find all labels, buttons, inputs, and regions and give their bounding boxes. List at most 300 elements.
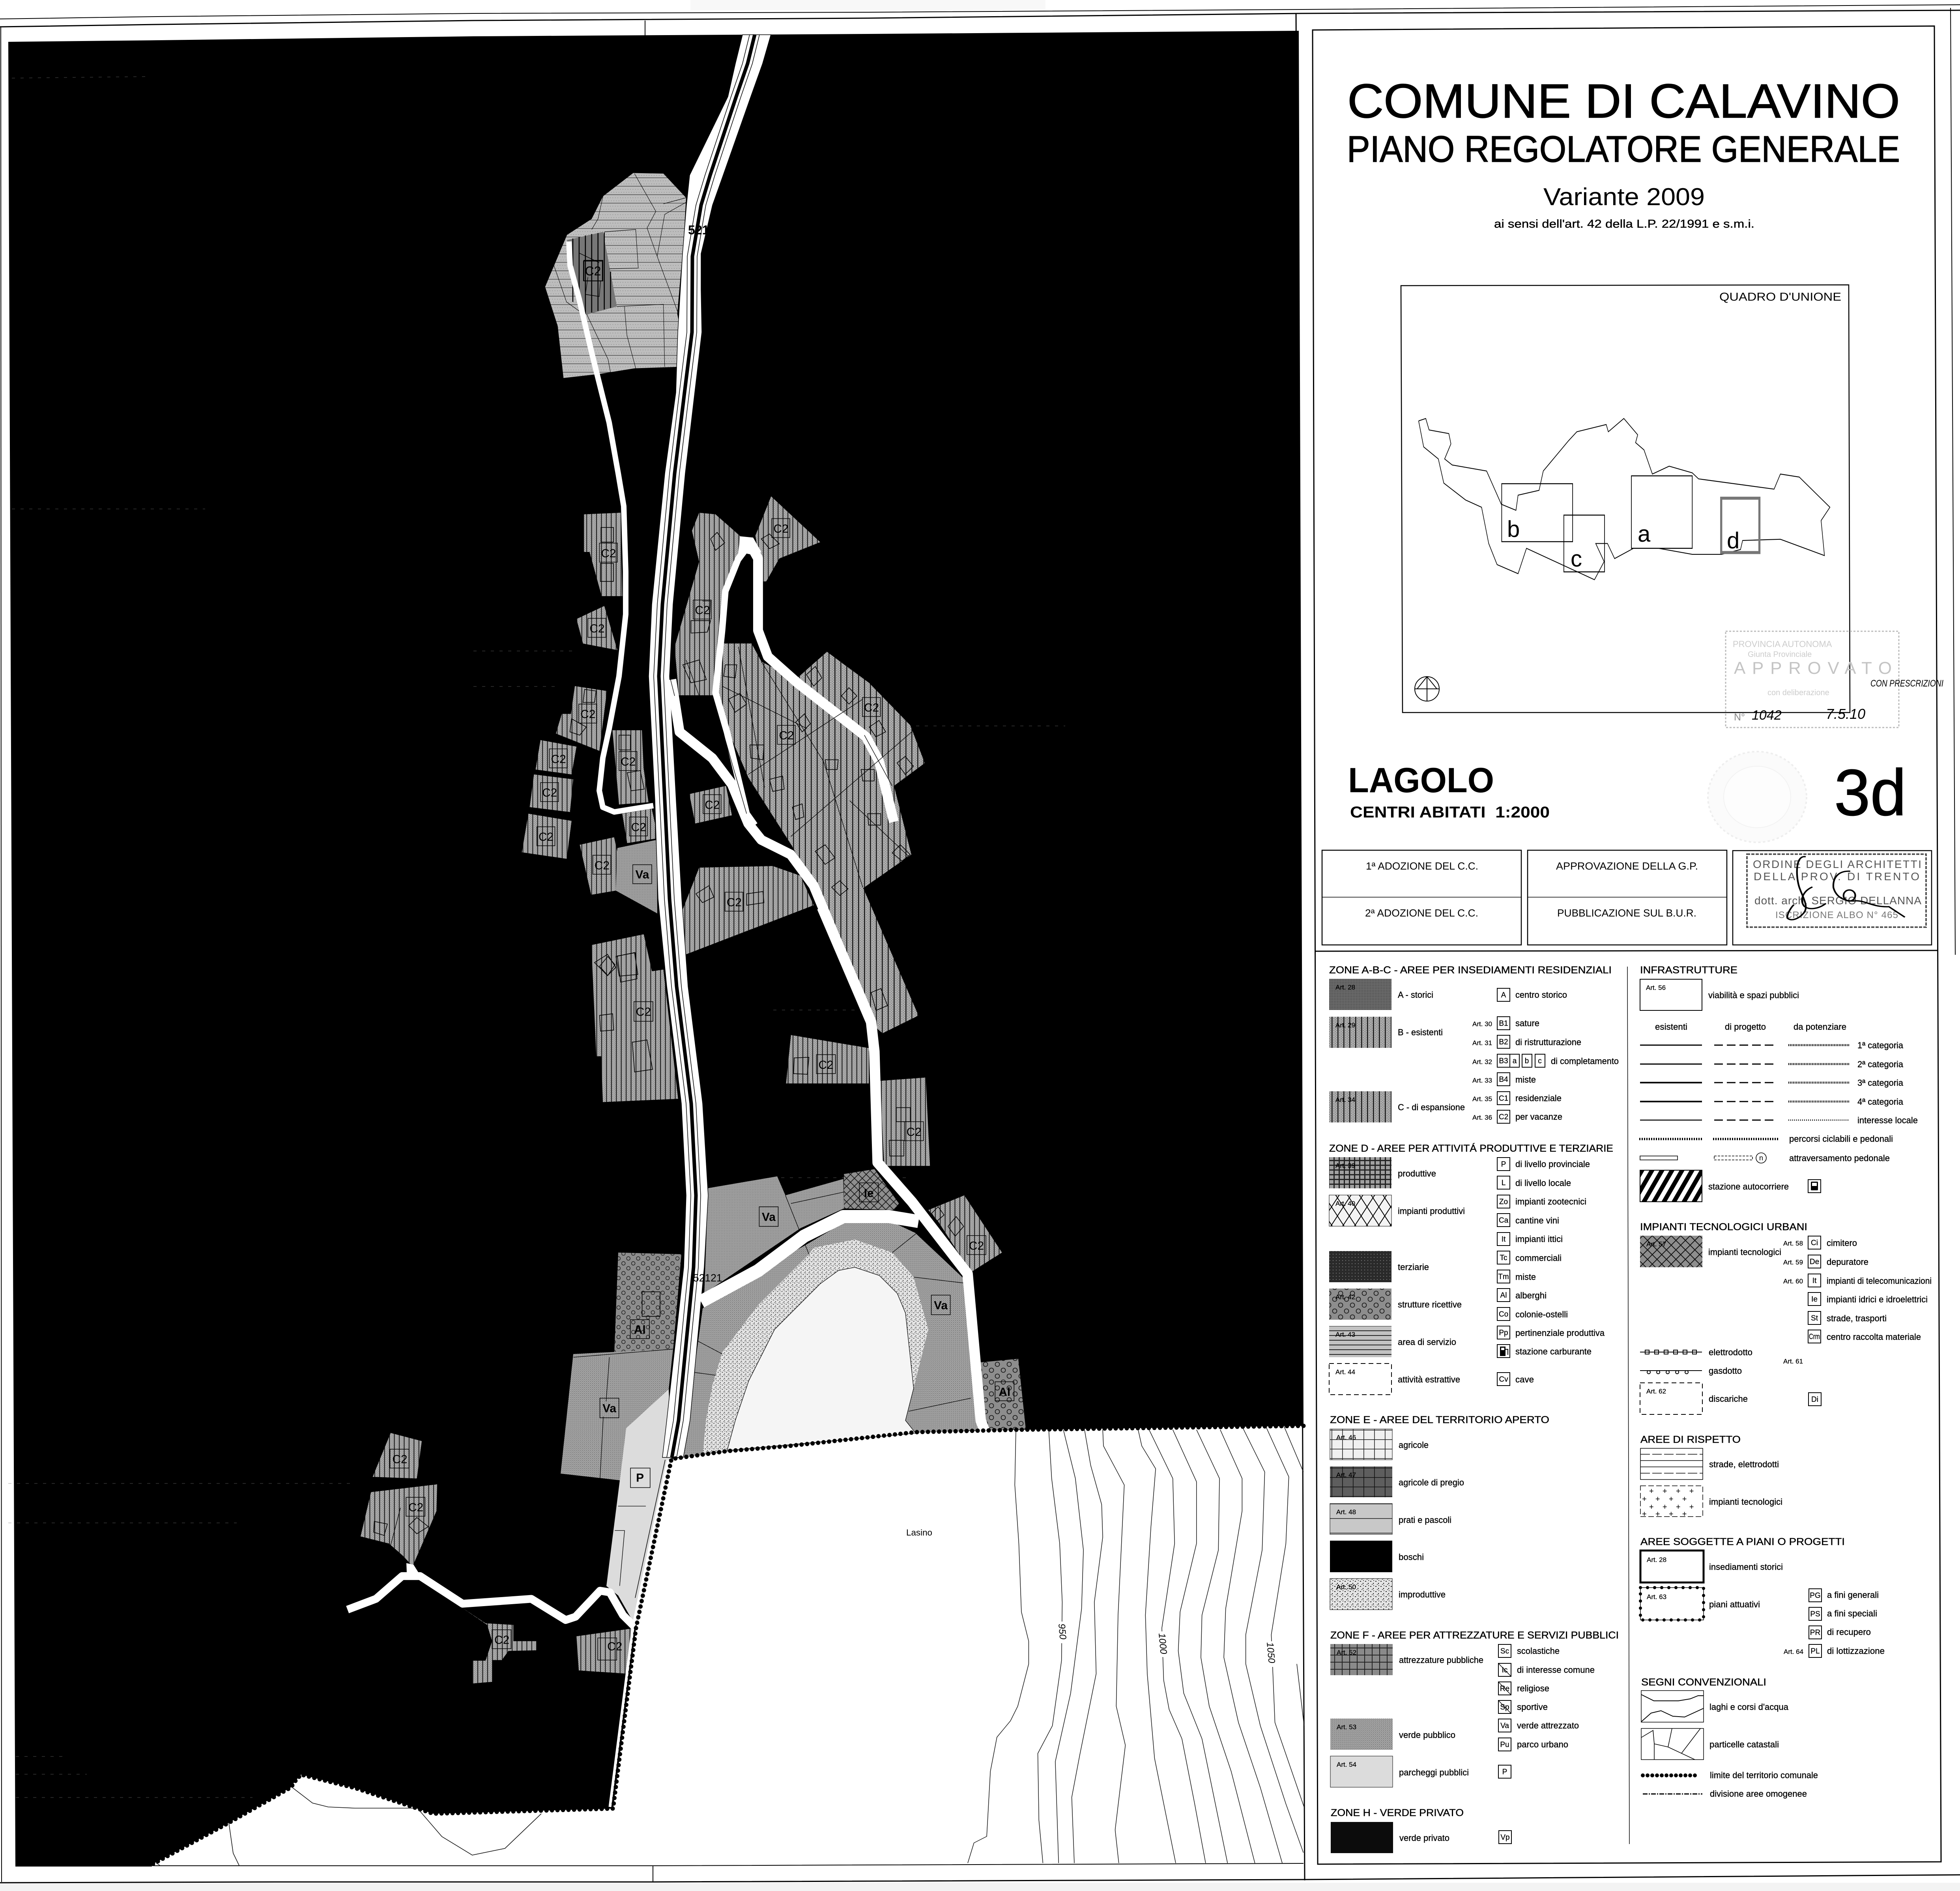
code B1: Art. 30 [1472,1020,1492,1028]
code Co [1497,1307,1568,1321]
swatch attrezzature pubbliche: attrezzature pubbliche [1399,1655,1483,1665]
code PL: PL [1810,1647,1820,1655]
stamp text: APPROVATO [1734,658,1892,678]
box: architect stamp [1733,851,1932,945]
code C1: Art. 35 [1472,1095,1492,1103]
legend top rule [1316,950,1938,951]
box: approvazione: APPROVAZIONE DELLA G.P. [1556,860,1698,872]
codes south: Al [999,1386,1010,1399]
code Ca [1497,1214,1559,1227]
legend: impianti tecnologici urbani [1640,1221,1932,1414]
code Va [1498,1719,1579,1732]
title: Comune di Calavino: COMUNE DI CALAVINO [1347,74,1900,128]
attraversamento pedonale [1640,1153,1890,1163]
zone C2 inside upper area [567,232,617,314]
legend: zone H [1331,1807,1511,1853]
swatch particelle [1641,1728,1779,1760]
code B1: sature [1515,1018,1539,1028]
codes south: C2 [818,1059,834,1072]
swatch attrezzature pubbliche: Art. 52 [1337,1649,1356,1656]
code Tc: commerciali [1515,1253,1562,1263]
elettrodotto line [1640,1347,1752,1357]
swatch strutture ricettive: Art. 42 [1335,1293,1355,1301]
swatch area di servizio: Art. 43 [1335,1331,1355,1338]
code L: di livello locale [1515,1178,1571,1188]
legend: zone A-B-C [1329,965,1619,1123]
Va parcel [616,840,657,913]
code Vp [1499,1831,1511,1844]
swatch impianti tecnologici rispetto: + + + + [1642,1495,1687,1504]
code Sc: Sc [1500,1647,1509,1655]
code B3 [1472,1054,1619,1067]
stamp text: PROVINCIA AUTONOMA [1733,639,1832,649]
inset frame [1401,285,1850,713]
codes south: Va [602,1402,616,1415]
code PS: PS [1810,1610,1820,1618]
code Ic: di interesse comune [1517,1665,1595,1675]
limite comunale: limite del territorio comunale [1710,1770,1818,1780]
zones lower area [591,934,1002,1353]
swatch impianti tecnologici rispetto: + + + + [1649,1503,1694,1511]
boxes south west [390,1449,650,1660]
swatch impianti tecnologici rispetto [1640,1486,1782,1519]
icon: fuel station: stazione carburante [1515,1347,1592,1356]
swatch impianti produttivi [1329,1195,1465,1226]
code De: depuratore [1827,1257,1868,1267]
buildings and parcel lines upper hamlet [570,527,913,982]
code B2: B2 [1499,1038,1508,1046]
code Ci: cimitero [1827,1238,1857,1248]
C2 and Va codes: C2 [542,786,557,799]
inset title: QUADRO D'UNIONE [1719,291,1841,303]
thin curves south of boundary [156,1787,541,1865]
swatch parcheggi pubblici [1330,1756,1469,1787]
C2 and Va codes: C2 [864,701,879,715]
code B1 [1472,1017,1539,1030]
swatch A storici [1329,979,1433,1010]
code C1: C1 [1499,1094,1508,1103]
label boxes C2/Va [537,518,881,911]
inset map: quadro d'unione [1401,285,1850,713]
code De: Art. 59 [1783,1259,1803,1266]
place name Lasino: Lasino [906,1528,932,1537]
sheet rectangles a b c [1502,476,1692,572]
heading: SEGNI CONVENZIONALI [1641,1677,1766,1688]
code Di: Di [1811,1395,1818,1404]
zone: prati e pascoli upper area [545,173,696,378]
sheet letters: c [1571,546,1582,572]
swatch improduttive: improduttive [1399,1590,1446,1599]
swatch improduttive: Art. 50 [1336,1583,1356,1591]
sheet letters: b [1507,516,1520,542]
Va area west of road [561,1349,673,1480]
code P parcheggi [1498,1765,1511,1778]
swatch agricole di pregio: Art. 47 [1336,1471,1356,1479]
icon: bus [1808,1180,1821,1193]
code PG: a fini generali [1827,1590,1879,1600]
swatch agricole: agricole [1399,1440,1429,1450]
swatch agricole di pregio: agricole di pregio [1399,1478,1464,1487]
code Di [1809,1393,1821,1406]
code A: centro storico [1515,990,1567,1000]
swatch prati e pascoli: Art. 48 [1336,1508,1356,1516]
code Cv [1497,1373,1534,1386]
C2 and Va codes: C2 [595,859,610,872]
swatch C espansione [1329,1091,1465,1122]
code Va: Va [1500,1722,1509,1730]
current sheet d highlighted [1721,498,1760,552]
swatch insediamenti storici: insediamenti storici [1709,1562,1783,1572]
code C2 [1472,1110,1562,1123]
parcel lines lower area [573,1192,971,1411]
swatch parcheggi pubblici: Art. 54 [1337,1761,1356,1768]
code St: St [1811,1314,1818,1322]
legend: segni convenzionali [1641,1677,1818,1799]
parcheggio light area [606,1389,671,1625]
codes south: Al [634,1323,646,1336]
code Pp: pertinenziale produttiva [1515,1328,1605,1338]
swatch insediamenti storici: Art. 28 [1647,1556,1666,1564]
code L: L [1502,1179,1506,1187]
code Zo [1497,1195,1586,1208]
swatch piani attuativi [1640,1588,1760,1620]
code Sp: sportive [1517,1702,1548,1712]
swatch impianti tecnologici rispetto: + + + + [1642,1510,1687,1519]
legend column divider [1627,967,1629,1844]
code It: impianti ittici [1515,1234,1563,1244]
road code 52121: 52121 [693,1272,722,1284]
codes south: C2 [907,1126,922,1139]
C2 and Va codes: C2 [773,522,789,535]
codes south west: C2 [607,1640,622,1653]
codes south: C2 [636,1005,651,1018]
code A: A [1501,991,1506,999]
code Pu: Pu [1500,1741,1509,1749]
code B4: miste [1515,1075,1536,1085]
stamp lines: DELLA PROV. DI TRENTO [1754,870,1919,883]
code PG: PG [1810,1592,1821,1600]
sheet name Lagolo: LAGOLO [1348,760,1494,800]
code PG [1809,1589,1879,1602]
code Ic [1498,1663,1595,1676]
light bulb area [727,1267,916,1450]
swatch impianti tecnologici: impianti tecnologici [1708,1247,1781,1257]
swatch prati e pascoli: prati e pascoli [1399,1515,1451,1525]
main road [649,35,771,1457]
road category labels: 2ª categoria [1857,1059,1904,1069]
contour label 950: 950 [1056,1623,1068,1640]
sheet letters: a [1638,521,1651,547]
swatch laghi: laghi e corsi d'acqua [1709,1702,1789,1712]
code Co: Co [1499,1310,1508,1319]
code PL: Art. 64 [1784,1648,1803,1655]
Va area north of branch road [704,1176,844,1293]
white road [348,1576,634,1627]
swatch impianti produttivi: Art. 40 [1335,1200,1355,1207]
code B3: Art. 32 [1472,1058,1492,1066]
road west in lower area [348,1417,646,1683]
municipal outline [1419,419,1830,580]
swatch viabilita: Art. 56 [1646,984,1666,991]
swatch improduttive [1330,1579,1446,1610]
map labels: south west [390,1449,650,1660]
legend: zone D [1329,1143,1613,1395]
code Al [1497,1289,1547,1302]
swatch impianti tecnologici: Art. 57 [1646,1240,1666,1248]
swatch prati e pascoli [1330,1504,1451,1534]
swatch piani attuativi: Art. 63 [1647,1593,1666,1601]
code Tm: Tm [1498,1273,1509,1281]
code Pu: parco urbano [1517,1739,1568,1749]
zones C2, upper hamlet [522,496,820,954]
label boxes south [600,1002,1014,1418]
white strip along the boundary [610,1460,668,1807]
code B4 [1472,1073,1536,1086]
thin lines along boundary strip [635,1460,665,1598]
code Ca: Ca [1499,1216,1509,1225]
swatch terziarie [1329,1251,1429,1282]
adoption boxes [1322,850,1932,945]
icon: fuel station [1497,1345,1592,1358]
stamp text: Giunta Provinciale [1748,650,1812,659]
faded round stamp [1708,752,1807,842]
heading: AREE SOGGETTE A PIANI O PROGETTI [1640,1536,1845,1547]
box: adozioni: 2ª ADOZIONE DEL C.C. [1365,907,1478,919]
code B4: B4 [1499,1075,1508,1084]
code Ca: cantine vini [1515,1216,1559,1225]
stamp lines [1753,858,1921,920]
branch road [701,1217,918,1302]
road category labels: 1ª categoria [1857,1040,1904,1050]
sheet letters: d [1727,528,1739,554]
approval stamp [1726,631,1943,728]
swatch B esistenti: B - esistenti [1398,1027,1443,1037]
code Pu [1498,1738,1568,1751]
improduttive dotted band [703,1240,928,1453]
swatch impianti produttivi: impianti produttivi [1398,1206,1465,1216]
codes south: Ie [864,1187,874,1200]
legend: aree soggette a piani o progetti [1640,1536,1885,1657]
column headers: di progetto [1725,1022,1766,1032]
code B2: di ristrutturazione [1515,1037,1581,1047]
code Ie: Ie [1811,1295,1818,1304]
swatch laghi [1641,1691,1789,1722]
box: approvazione: PUBBLICAZIONE SUL B.U.R. [1557,907,1696,919]
gasdotto line [1640,1366,1742,1376]
code Co: colonie-ostelli [1515,1309,1568,1319]
code B2 [1472,1035,1581,1048]
codes south: Va [934,1299,948,1312]
panel frame [1313,26,1941,1864]
column headers [1655,1022,1846,1032]
left limb [716,544,755,825]
column headers: esistenti [1655,1022,1687,1032]
codes south: C2 [969,1239,984,1252]
C2 and Va codes: C2 [705,799,720,812]
codes south west [392,1453,644,1653]
code Ic: Ic [1502,1666,1507,1674]
code Tc: Tc [1500,1254,1507,1262]
code Va: verde attrezzato [1517,1721,1579,1730]
codes south [602,1005,1010,1415]
heading: INFRASTRUTTURE [1640,965,1737,976]
swatch attivita estrattive: attività estrattive [1398,1375,1460,1384]
swatch particelle: particelle catastali [1709,1739,1779,1749]
box: approvazione [1528,850,1727,945]
right title panel [1313,26,1943,1864]
municipal outline and sheet rectangles [1419,419,1830,580]
code Sp: Sp [1500,1703,1509,1711]
attraversamento pedonale: attraversamento pedonale [1789,1153,1890,1163]
municipal boundary dots [152,1426,1304,1865]
swatch impianti tecnologici [1640,1236,1781,1267]
code Tm [1497,1270,1536,1283]
swatch C espansione: Art. 34 [1335,1096,1355,1104]
stamp lines: ISCRIZIONE ALBO N° 465 [1775,910,1898,920]
contours [968,1426,1304,1863]
code B3: c [1538,1057,1542,1065]
scan noise band: top edge [690,0,1045,10]
code C2: C2 [1499,1113,1508,1121]
swatch area di servizio: area di servizio [1398,1337,1456,1347]
north symbol [1415,677,1439,701]
code It telecomunicazioni [1783,1274,1932,1287]
article 61: Art. 61 [1783,1358,1803,1365]
heading: ZONE H - VERDE PRIVATO [1331,1807,1464,1818]
sheet number 3d: 3d [1834,756,1906,829]
C2 parcels [522,496,820,954]
legend: infrastrutture [1639,965,1918,1202]
heading: ZONE D - AREE PER ATTIVITÁ PRODUTTIVE E TERZIARIE [1329,1143,1613,1154]
contour label 1050: 1050 [1264,1642,1277,1664]
swatch impianti tecnologici rispetto: + + + + [1649,1487,1694,1496]
swatch verde pubblico [1330,1719,1455,1750]
swatch agricole di pregio [1330,1466,1464,1497]
code De [1783,1255,1868,1268]
swatch impianti tecnologici rispetto: impianti tecnologici [1709,1497,1782,1507]
C2 and Va codes [539,522,879,909]
code Pp [1497,1326,1605,1339]
swatch verde pubblico: Art. 53 [1337,1723,1356,1731]
swatch stazione autocorriere [1640,1170,1789,1202]
code B4: Art. 33 [1472,1077,1492,1084]
swatch B esistenti [1329,1017,1443,1048]
code C2: Art. 36 [1472,1114,1492,1121]
heading: ZONE F - AREE PER ATTREZZATURE E SERVIZI PUBBLICI [1330,1630,1619,1641]
code Ci: Art. 58 [1783,1240,1803,1247]
C2 and Va codes: C2 [727,896,742,909]
contour label 1000: 1000 [1156,1633,1169,1655]
C2 and Va codes: C2 [621,755,636,768]
centri abitati scale: CENTRI ABITATI 1:2000 [1350,804,1550,821]
code P: P [1501,1160,1506,1169]
swatch attivita estrattive: Art. 44 [1335,1368,1355,1376]
swatch boschi: boschi [1399,1552,1424,1562]
code Ie: impianti idrici e idroelettrici [1827,1294,1928,1304]
C2 and Va codes: C2 [589,622,605,635]
C2 and Va codes: C2 [601,547,616,560]
C2 and Va codes: C2 [695,604,710,617]
code B3: b [1525,1057,1529,1065]
box: adozioni [1322,850,1521,945]
signature [1787,857,1905,920]
code Tm: miste [1515,1272,1536,1282]
codes south: Va [762,1210,776,1223]
code St: strade, trasporti [1827,1313,1887,1323]
code It: It [1502,1235,1506,1244]
big C2 area east of road [714,643,925,1033]
code Al: Al [1500,1291,1507,1300]
handwritten number and date: 1042 [1752,708,1782,723]
C2 parcels south-west [361,1433,634,1683]
map label: C2 upper zone [584,260,603,281]
codes south west: C2 [494,1633,509,1646]
Al parcel with circles [614,1253,681,1353]
stamp lines: ORDINE DEGLI ARCHITETTI [1753,858,1921,870]
contour gaps for labels [1055,1622,1277,1667]
map labels: group north [537,518,881,911]
road category lines [1640,1045,1849,1120]
code PS: a fini speciali [1827,1609,1877,1618]
code Tc [1497,1251,1562,1264]
code Ci: Ci [1811,1239,1818,1247]
road continuing south [822,907,985,1431]
heading: IMPIANTI TECNOLOGICI URBANI [1640,1221,1807,1233]
box: adozioni: 1ª ADOZIONE DEL C.C. [1366,860,1478,872]
code C2: per vacanze [1515,1112,1562,1122]
swatch strade elettrodotti: strade, elettrodotti [1709,1459,1779,1469]
code It telecomunicazioni: impianti di telecomunicazioni [1827,1276,1932,1286]
Va area around the white bulb [683,1221,981,1457]
swatch agricole: Art. 46 [1336,1434,1356,1441]
code A [1497,988,1567,1001]
code Ci [1783,1236,1857,1249]
gasdotto line: gasdotto [1709,1366,1742,1376]
legal reference: ai sensi dell'art. 42 della L.P. 22/1991 e s.m.i. [1494,218,1754,230]
legend: zone E [1330,1414,1549,1610]
subtitle: Piano Regolatore Generale: PIANO REGOLATORE GENERALE [1347,128,1900,170]
scan noise band: bottom edge [0,1883,1960,1891]
swatch terziarie: terziarie [1398,1262,1429,1272]
secondary road: west loop [569,241,653,812]
swatch boschi [1330,1541,1424,1572]
code P parcheggi: P [1502,1768,1507,1776]
code Crm [1808,1330,1921,1343]
map: zoning of Lagolo [8,31,1304,1867]
column headers: da potenziare [1794,1022,1846,1032]
swatch strutture ricettive: strutture ricettive [1398,1300,1462,1309]
code PS [1809,1607,1877,1620]
swatch agricole [1330,1429,1429,1460]
stamp frame [1726,631,1899,728]
swatch insediamenti storici [1640,1551,1783,1582]
stamp lines: dott. arch. SERGIO DELLANNA [1754,894,1921,907]
C2 and Va codes: C2 [551,753,566,766]
heading: ZONE A-B-C - AREE PER INSEDIAMENTI RESIDENZIALI [1329,965,1612,976]
code Cv: Cv [1499,1375,1508,1384]
code Zo: Zo [1499,1198,1508,1206]
stamp border [1747,854,1926,927]
handwritten date: 7.5.10 [1826,706,1865,722]
scan streaks on black area [8,77,1065,1797]
code PR: di recupero [1827,1627,1871,1637]
swatch strade elettrodotti [1640,1448,1779,1480]
C2 and Va codes: C2 [580,708,595,721]
swatch viabilita: viabilità e spazi pubblici [1708,990,1799,1000]
code Sc: scolastiche [1517,1646,1560,1656]
code B3: B3 [1499,1057,1508,1065]
swatch attivita estrattive [1329,1364,1460,1395]
